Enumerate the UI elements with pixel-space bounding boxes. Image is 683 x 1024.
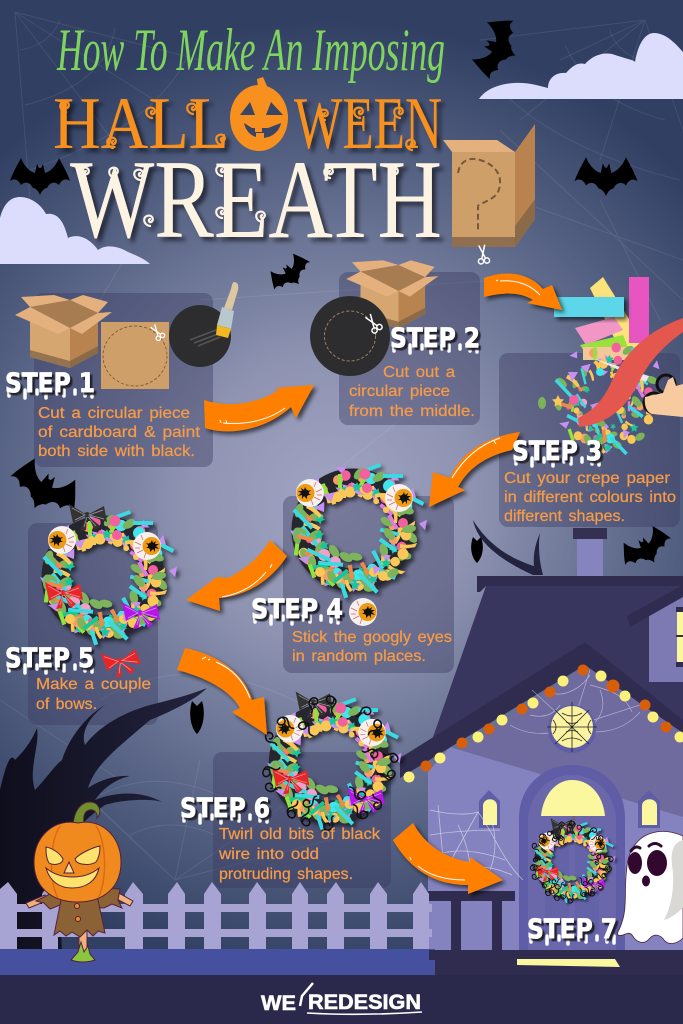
confetti xyxy=(554,343,660,455)
bat middle xyxy=(264,249,317,298)
panel: step 3 xyxy=(499,353,680,527)
title: wreath: WREATH xyxy=(70,138,442,262)
step 1 text: both side with black. xyxy=(38,443,195,460)
title: halloween: WEEN xyxy=(294,83,442,165)
step 1 illustration xyxy=(15,282,238,389)
icon: cardboard sheet xyxy=(101,322,169,389)
scissors xyxy=(592,358,675,413)
window right xyxy=(638,790,660,828)
tree xyxy=(0,688,207,950)
leg and grass xyxy=(71,930,95,962)
icon: spider web gable xyxy=(510,670,640,753)
coat xyxy=(54,895,105,937)
step 2 text: Cut out a xyxy=(383,364,455,381)
step 2 text: from the middle. xyxy=(349,403,475,420)
arrow: step 3 to 4 xyxy=(429,432,520,507)
step 3 illustration xyxy=(538,277,683,455)
step 1 text: of cardboard & paint xyxy=(38,424,201,441)
bat by chimney xyxy=(615,521,677,576)
icon: black circle with brush xyxy=(169,282,238,367)
panel: step 5 xyxy=(28,523,158,725)
step 7 label: STEP 7 xyxy=(527,914,617,945)
scarecrow pumpkin xyxy=(26,802,133,962)
googly eye left xyxy=(296,479,324,507)
cloud left xyxy=(0,197,150,264)
step 6 text: wire into odd xyxy=(218,846,319,863)
title: halloween: HALL xyxy=(53,83,229,165)
ghost xyxy=(617,831,683,944)
arrow: step 1 to 2 xyxy=(204,385,314,431)
bow: red xyxy=(45,582,83,609)
icon: black circle dashed xyxy=(310,296,390,376)
step 3 text: Cut your crepe paper xyxy=(504,470,671,487)
wreath: step 6 xyxy=(246,680,414,849)
step 3 text: in different colours into xyxy=(504,489,676,506)
ribbon xyxy=(578,318,683,427)
title: halloween xyxy=(53,83,442,165)
step 6 label: STEP 6 xyxy=(180,793,270,824)
step 4 text: Stick the googly eyes xyxy=(292,629,452,646)
step 3 text: different shapes. xyxy=(504,508,625,525)
panel: step 6 xyxy=(213,752,391,888)
window left xyxy=(479,790,500,828)
ground xyxy=(0,949,683,1024)
step 2 text xyxy=(349,364,475,420)
hand xyxy=(645,377,683,417)
step 1 text: Cut a circular piece xyxy=(38,405,190,422)
icon: box xyxy=(15,295,112,368)
head xyxy=(34,822,121,902)
door xyxy=(519,765,625,950)
step 5 text: Make a couple xyxy=(36,676,151,693)
step 1 text xyxy=(38,405,201,460)
step 4 text xyxy=(292,629,452,665)
step 6 text: Twirl old bits of black xyxy=(219,826,381,843)
panel: step 1 xyxy=(34,293,213,467)
panel: step 4 xyxy=(283,496,454,673)
arms xyxy=(26,891,133,908)
step 4 label: STEP 4 xyxy=(251,594,343,625)
step 6 text: protruding shapes. xyxy=(219,866,353,883)
wreath: step 4 xyxy=(268,446,440,617)
step 4 text: in random places. xyxy=(292,648,426,665)
step 6 text xyxy=(218,826,381,883)
porch xyxy=(426,891,515,950)
crepe papers xyxy=(554,277,649,360)
step 3 text xyxy=(504,470,676,525)
fence xyxy=(0,882,432,949)
wreath: step 5 xyxy=(18,493,190,664)
icon: googly eye label xyxy=(349,598,377,626)
step 3 label: STEP 3 xyxy=(512,436,602,467)
arrow: step 5 to 6 xyxy=(177,648,267,735)
panel: step 2 xyxy=(339,272,480,425)
bat top right xyxy=(468,12,527,85)
string lights xyxy=(404,664,683,782)
icon: title pumpkin xyxy=(230,77,288,151)
step 2 text: circular piece xyxy=(349,383,450,400)
step 5 text: of bows. xyxy=(36,696,97,713)
icon: box xyxy=(346,260,438,328)
arrow: step 6 to 7 xyxy=(393,823,503,894)
bow: purple xyxy=(122,602,160,629)
house xyxy=(400,520,683,950)
icon: red bow xyxy=(100,647,142,680)
step 2 label: STEP 2 xyxy=(390,323,480,354)
bat by step 5 xyxy=(3,452,87,525)
bow: black xyxy=(69,504,107,531)
step 2 illustration xyxy=(310,260,438,376)
logo: REDESIGN xyxy=(308,991,421,1014)
wall xyxy=(428,665,683,950)
gable band xyxy=(400,642,683,778)
logo: WE xyxy=(261,992,296,1015)
logo xyxy=(261,983,422,1015)
tree branch on roof xyxy=(471,520,543,575)
step 5 text xyxy=(36,676,151,713)
cloud top right xyxy=(479,33,683,99)
spider web wall xyxy=(430,805,523,880)
arrow: step 4 to 5 xyxy=(186,540,287,611)
step 5 label: STEP 5 xyxy=(5,643,94,674)
black wires xyxy=(262,696,398,830)
bat left xyxy=(10,158,70,195)
icon: question mark box xyxy=(443,124,535,264)
bat right xyxy=(574,157,638,196)
roof xyxy=(432,586,683,740)
stem xyxy=(73,802,100,826)
step 1 label: STEP 1 xyxy=(5,368,95,399)
googly eye right xyxy=(385,484,413,512)
wreath: step 7 xyxy=(520,811,623,914)
dormer xyxy=(627,585,683,682)
chimney xyxy=(573,528,607,578)
arrow: step 2 to 3 xyxy=(484,273,562,310)
